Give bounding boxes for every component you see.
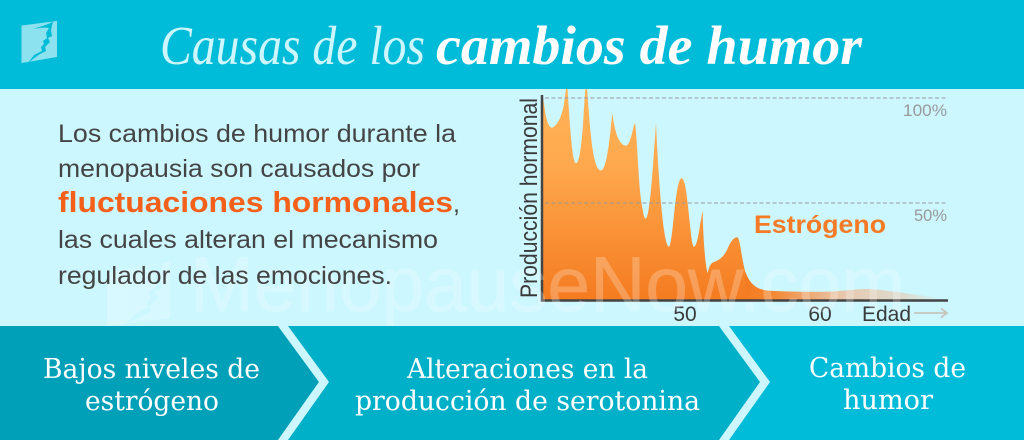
tick 50: 50 [673,303,697,326]
50% label: 50% [914,206,947,225]
title: Causas de los [160,15,425,76]
intro text block: menopausia son causados por [58,155,420,183]
icon: face logo [22,21,57,63]
flow: step 1 panel [0,326,319,440]
100% label: 100% [903,101,947,120]
watermark: MenopauseNow.com [190,240,905,328]
intro text block: regulador de las emociones. [58,262,392,290]
intro text block [58,120,460,290]
estrogen area [543,89,746,300]
estrogen label: Estrógeno [754,211,886,239]
step 2 text: Alteraciones en la [406,354,648,385]
step 1 text: Bajos niveles de [43,354,260,385]
intro text block: , [453,190,460,218]
title: cambios de humor [436,15,863,76]
title [160,15,863,76]
hormone chart [542,89,948,326]
intro text block: Los cambios de humor durante la [58,120,456,148]
tick 60: 60 [808,303,832,326]
axes [542,95,948,300]
intro text block: las cuales alteran el mecanismo [58,226,438,254]
step 3 text: humor [843,385,933,416]
arrow: age [914,308,947,318]
step 2 text [355,354,700,417]
step 3 text [809,353,966,416]
flow: step 3 panel [700,326,1024,440]
estrogen tail [745,271,945,300]
y axis label: Producción hormonal [516,98,543,298]
header band [0,0,1024,89]
50% reference line [545,202,948,204]
step 3 text: Cambios de [809,353,966,384]
edad label: Edad [862,303,911,326]
arrow: chevron 1 [278,326,329,440]
step 2 text: producción de serotonina [355,386,700,417]
step 1 text: estrógeno [85,386,219,417]
flow: step 2 panel [278,326,760,440]
intro text block: fluctuaciones hormonales [58,187,453,219]
arrow: chevron 2 [719,326,770,440]
step 1 text [43,354,260,417]
100% reference line [545,97,948,99]
